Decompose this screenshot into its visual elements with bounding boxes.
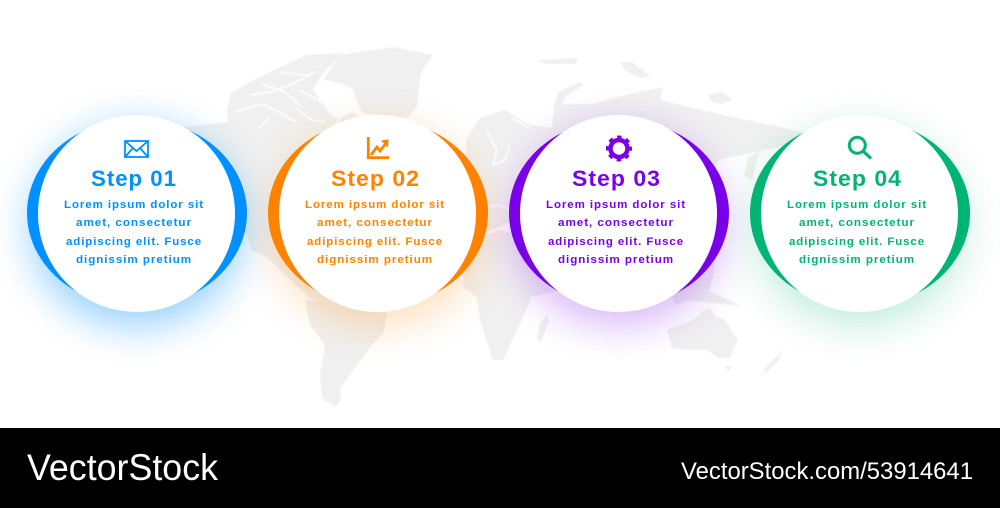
- description: step 01: amet, consectetur: [76, 217, 192, 229]
- panel: step 02: [268, 115, 488, 326]
- map: Japan: [744, 150, 760, 180]
- map: North America and Arctic archipelago: [180, 53, 400, 305]
- glow: blue: [31, 126, 243, 326]
- crescent ring: blue: [27, 119, 247, 307]
- white circle: [520, 115, 717, 312]
- crescent ring: green: [750, 119, 970, 307]
- glow: green: [754, 126, 966, 326]
- heading: step 02: Step 02: [331, 166, 420, 191]
- map: Novaya Zemlya: [553, 82, 584, 110]
- description: step 03: adipiscing elit. Fusce: [548, 236, 684, 248]
- glow: purple: [513, 126, 725, 326]
- map: Asia: [552, 87, 803, 300]
- brand name: VectorStock: [27, 447, 218, 488]
- map: Greenland: [323, 47, 433, 118]
- description: step 02: amet, consectetur: [317, 217, 433, 229]
- description: step 03: [546, 199, 686, 266]
- world map: [180, 47, 803, 407]
- footer background: [0, 428, 1000, 508]
- map: Australia: [667, 308, 738, 358]
- white circle: [38, 115, 235, 312]
- heading: step 03: Step 03: [572, 166, 661, 191]
- white circle: [761, 115, 958, 312]
- description: step 04: [787, 199, 927, 266]
- map: Siberian islands: [708, 92, 733, 104]
- glow: orange: [272, 126, 484, 326]
- description: step 04: amet, consectetur: [799, 217, 915, 229]
- map: arctic specks: [538, 58, 578, 64]
- description: step 02: dignissim pretium: [317, 254, 433, 266]
- description: step 02: adipiscing elit. Fusce: [307, 236, 443, 248]
- description: step 03: dignissim pretium: [558, 254, 674, 266]
- image id: VectorStock.com/53914641: [681, 458, 973, 485]
- heading: step 04: Step 04: [813, 166, 902, 191]
- description: step 04: adipiscing elit. Fusce: [789, 236, 925, 248]
- description: step 01: dignissim pretium: [76, 254, 192, 266]
- description: step 03: amet, consectetur: [558, 217, 674, 229]
- white circle: [279, 115, 476, 312]
- description: step 02: [305, 199, 445, 266]
- description: step 02: Lorem ipsum dolor sit: [305, 199, 445, 211]
- icon: line chart: [368, 137, 389, 158]
- map: Svalbard: [620, 62, 650, 78]
- icon: magnifier: [849, 137, 871, 158]
- map: South America: [305, 300, 387, 407]
- map: New Zealand: [763, 350, 783, 375]
- crescent ring: orange: [268, 119, 488, 307]
- heading: step 01: Step 01: [91, 166, 177, 191]
- map: Indonesia: [672, 288, 740, 306]
- map: Europe: [466, 110, 560, 232]
- panel: step 01: [27, 115, 247, 326]
- description: step 01: [64, 199, 204, 266]
- description: step 01: Lorem ipsum dolor sit: [64, 199, 204, 211]
- description: step 04: dignissim pretium: [799, 254, 915, 266]
- icon: gear: [608, 137, 630, 160]
- description: step 04: Lorem ipsum dolor sit: [787, 199, 927, 211]
- crescent ring: purple: [509, 119, 729, 307]
- map: Tasmania: [725, 366, 732, 372]
- description: step 01: adipiscing elit. Fusce: [66, 236, 202, 248]
- map: Africa: [463, 230, 560, 360]
- panel: step 04: [750, 115, 970, 326]
- description: step 03: Lorem ipsum dolor sit: [546, 199, 686, 211]
- icon: envelope: [125, 141, 148, 157]
- map: landmasses: [180, 47, 803, 407]
- map: Madagascar: [537, 315, 549, 342]
- footer bar: [0, 428, 1000, 508]
- panel: step 03: [509, 115, 729, 326]
